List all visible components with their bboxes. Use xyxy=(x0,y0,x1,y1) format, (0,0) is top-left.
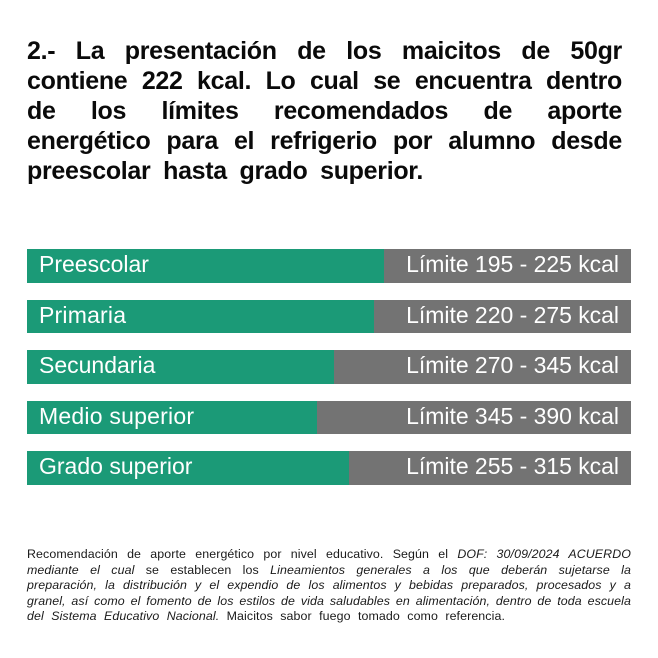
bar: Medio superior: Límite 345 - 390 kcal xyxy=(406,403,619,429)
footnote: granel, así como el fomento de los estilos de vida saludables en alimentación, dentro de toda escuela xyxy=(27,594,631,608)
heading: 2.- La presentación de los maicitos de 50gr xyxy=(27,37,622,65)
footnote: mediante el cual se establecen los Lineamientos generales a los que deberán sujetarse la xyxy=(27,562,631,576)
bar: Secundaria: Secundaria xyxy=(39,352,155,378)
bar: Preescolar: Preescolar xyxy=(39,251,149,277)
heading xyxy=(27,37,622,185)
bar: Medio superior xyxy=(27,401,631,434)
bar: Preescolar: Límite 195 - 225 kcal xyxy=(406,251,619,277)
heading: contiene 222 kcal. Lo cual se encuentra dentro xyxy=(27,67,622,95)
bar: Secundaria xyxy=(27,350,631,384)
bar: Primaria xyxy=(27,300,631,333)
bar: Preescolar xyxy=(27,249,631,283)
bar: Grado superior xyxy=(27,451,631,485)
bar: Grado superior: Grado superior xyxy=(39,453,192,479)
bar chart xyxy=(27,249,631,485)
heading: energético para el refrigerio por alumno desde xyxy=(27,127,622,155)
footnote: Recomendación de aporte energético por nivel educativo. Según el DOF: 30/09/2024 ACUERDO xyxy=(27,547,631,561)
bar: Secundaria: Límite 270 - 345 kcal xyxy=(406,352,619,378)
footnote: del Sistema Educativo Nacional. Maicitos sabor fuego tomado como referencia. xyxy=(27,609,505,623)
footnote xyxy=(26,547,631,623)
footnote: preparación, la distribución y el expendio de los alimentos y bebidas preparados, procesados y a xyxy=(27,578,631,592)
bar: Medio superior: Medio superior xyxy=(39,403,194,429)
heading: preescolar hasta grado superior. xyxy=(27,157,423,185)
bar: Grado superior: Límite 255 - 315 kcal xyxy=(406,453,619,479)
heading: de los límites recomendados de aporte xyxy=(27,97,622,125)
bar: Primaria: Primaria xyxy=(39,302,126,328)
bar: Primaria: Límite 220 - 275 kcal xyxy=(406,302,619,328)
